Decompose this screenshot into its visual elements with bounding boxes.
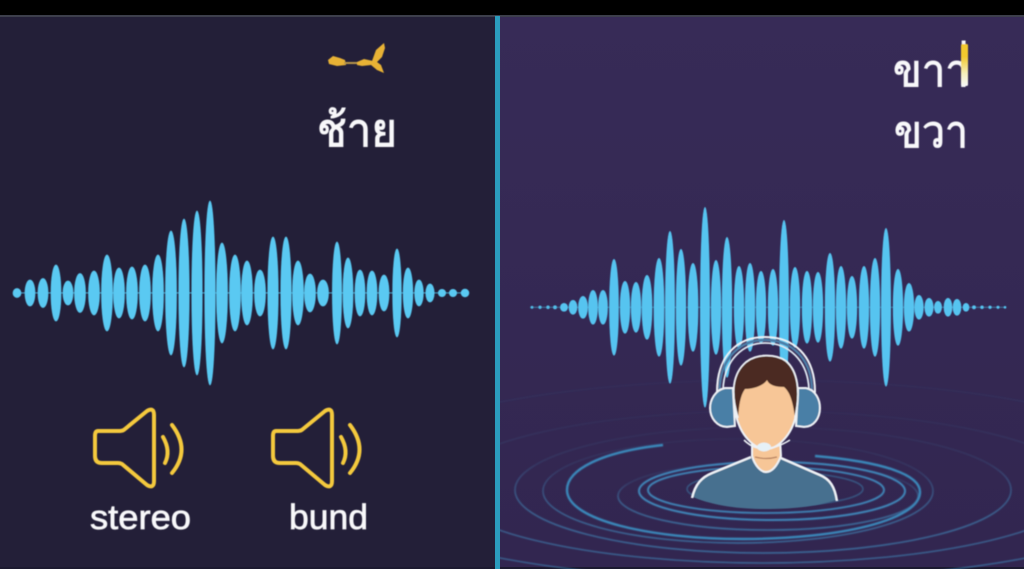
label: stereo: stereo [90, 499, 191, 537]
panel: right background [500, 16, 1024, 569]
label: bund: bund [289, 498, 368, 537]
chart: right waveform [530, 207, 1006, 407]
heading: right line 2: ขวา [894, 108, 968, 157]
icon: speaker stereo [95, 410, 182, 486]
neck [752, 438, 781, 472]
chart: left waveform [13, 201, 469, 385]
center divider [495, 16, 500, 569]
hair [734, 355, 798, 418]
heading: right line 1: ขาา่ [893, 40, 969, 96]
top black bar [0, 0, 1024, 16]
face [735, 366, 797, 449]
ear cup left [710, 388, 735, 427]
ripples [500, 438, 1024, 569]
person with headphones [692, 337, 837, 509]
ear cup right [796, 388, 820, 427]
heading: left: ช้าย [317, 104, 397, 156]
icon: gold bird [328, 43, 385, 73]
panel: left background [0, 16, 495, 569]
headband [717, 337, 815, 392]
microphone [744, 440, 790, 448]
icon: speaker bund [273, 410, 360, 486]
body [693, 457, 837, 509]
